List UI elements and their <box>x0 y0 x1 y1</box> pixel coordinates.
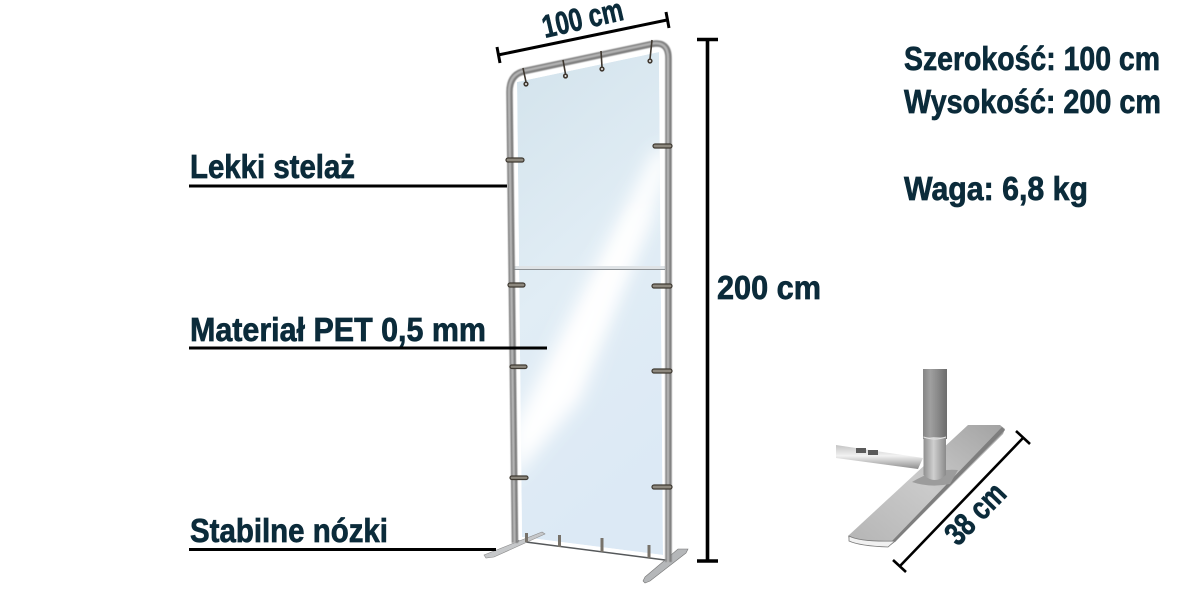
specifications text: Szerokość: 100 cm <box>904 40 1160 77</box>
label: stable feet <box>189 512 496 551</box>
middle crossbar <box>512 266 665 270</box>
height dimension: 200 cm: 200 cm <box>717 269 821 306</box>
bottom hooks <box>526 533 649 558</box>
tubular frame <box>509 43 668 562</box>
label: light frame: Lekki stelaż <box>190 148 355 185</box>
vertical pole <box>923 369 947 480</box>
foot length dimension: 38 cm <box>893 431 1030 572</box>
specifications text: Waga: 6,8 kg <box>904 170 1088 207</box>
pole base flare <box>912 470 958 486</box>
label: PET material: Materiał PET 0,5 mm <box>190 311 486 348</box>
foot plate <box>848 425 1005 547</box>
height dimension: 200 cm <box>697 39 821 561</box>
width dimension: 100 cm <box>497 0 669 63</box>
side tube <box>836 445 923 469</box>
foot length dimension: 38 cm: 38 cm <box>937 475 1013 552</box>
right foot <box>643 549 688 583</box>
foot detail illustration <box>836 369 1005 547</box>
label: stable feet: Stabilne nózki <box>190 512 388 549</box>
transparent PET panel <box>517 52 663 555</box>
plate front edge <box>849 536 895 547</box>
left foot <box>484 532 545 558</box>
plate right edge <box>892 427 1005 542</box>
bottom crossbar <box>518 541 665 560</box>
banner stand illustration <box>484 40 688 583</box>
side clamps <box>506 144 672 489</box>
specifications text <box>904 40 1161 207</box>
specifications text: Wysokość: 200 cm <box>904 83 1161 120</box>
top hooks <box>523 40 652 86</box>
label: light frame <box>189 148 507 188</box>
